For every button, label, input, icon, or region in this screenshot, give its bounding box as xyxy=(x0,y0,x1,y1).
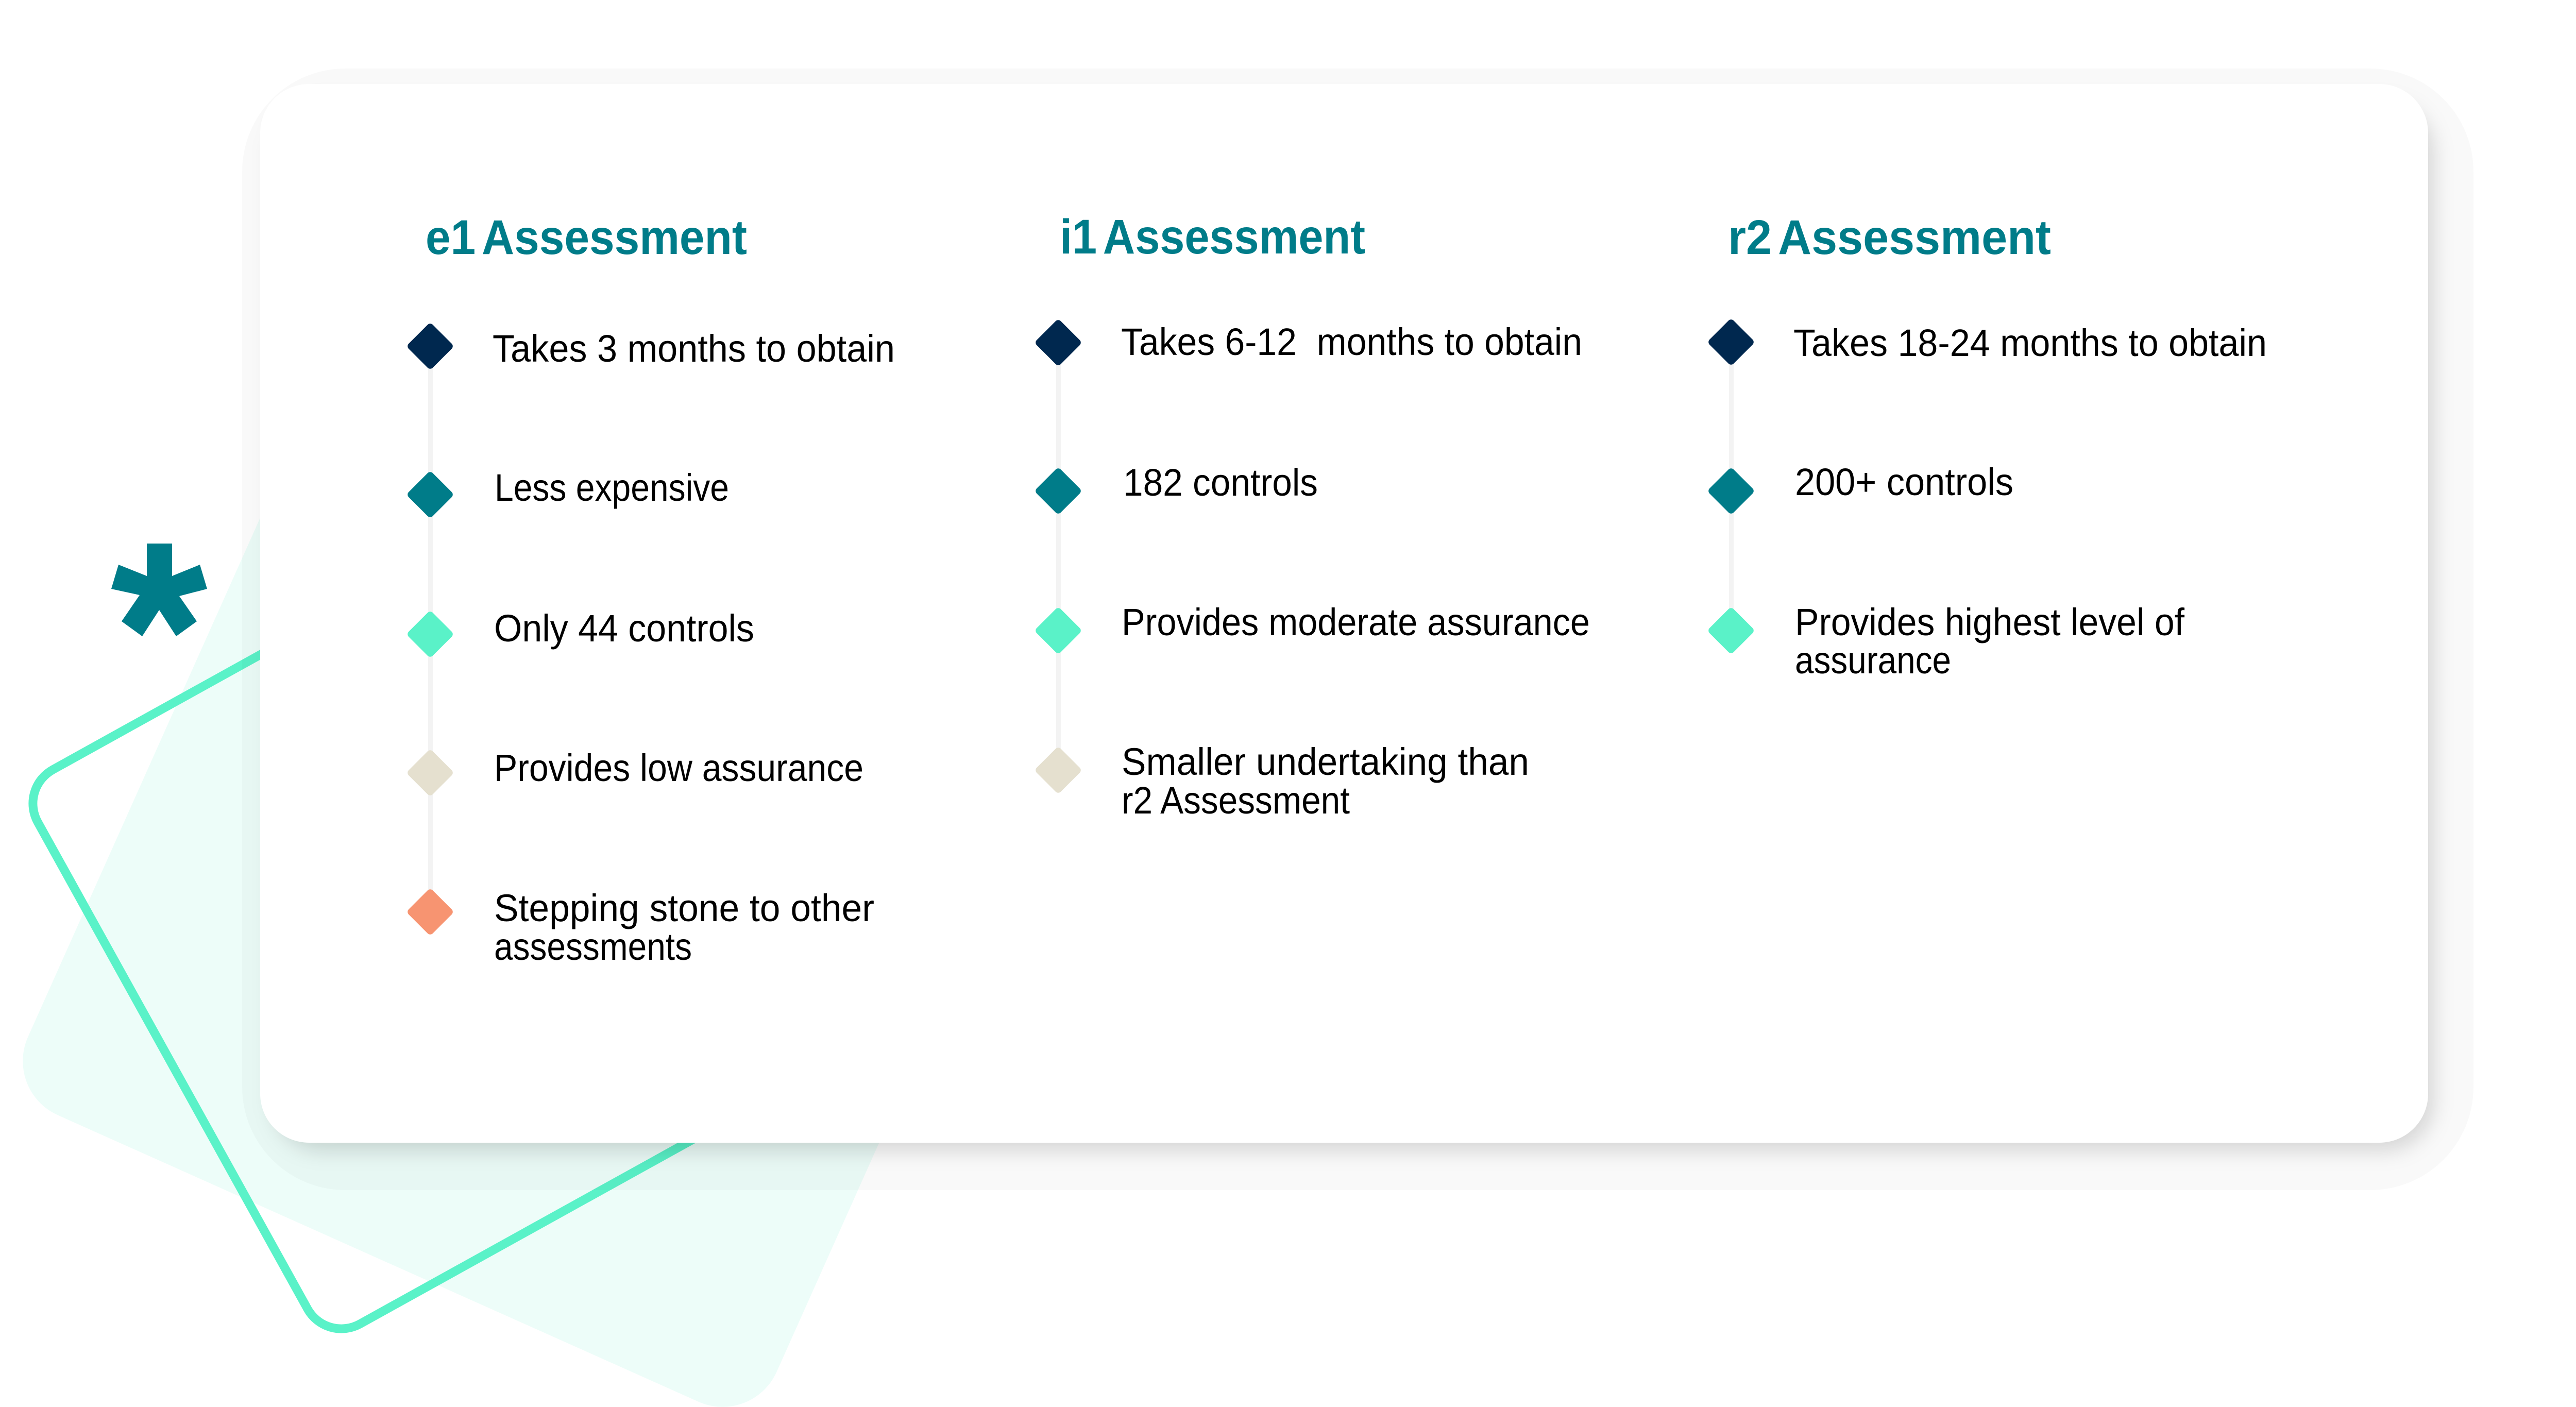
item: less expensive: Less expensive xyxy=(495,466,729,509)
item: only 44 controls: Only 44 controls xyxy=(494,607,754,650)
item: smaller undertaking: Smaller undertaking than xyxy=(1122,740,1529,783)
item: provides low assurance: Provides low assurance xyxy=(494,747,863,789)
item: 200+ controls: 200+ controls xyxy=(1795,461,2013,503)
item: stepping stone xyxy=(406,887,874,968)
item: provides highest level xyxy=(1707,601,2184,682)
card soft drop shadow xyxy=(273,103,2433,1150)
icon: teal asterisk xyxy=(111,544,207,636)
item: stepping stone: assessments xyxy=(494,925,692,968)
timeline connector xyxy=(1729,342,1734,631)
background shape: pale mint rotated square xyxy=(4,342,1088,1407)
item: 182 controls xyxy=(1034,461,1318,515)
timeline connector xyxy=(1056,343,1061,770)
item: takes 18-24 months: Takes 18-24 months to obtain xyxy=(1793,321,2267,364)
column: i1 Assessment xyxy=(1034,210,1590,822)
item: provides highest level: assurance xyxy=(1795,639,1951,682)
item: provides highest level: Provides highest level of xyxy=(1795,601,2184,643)
item: takes 3 months: Takes 3 months to obtain xyxy=(493,327,895,370)
heading: r2 Assessment: r2 Assessment xyxy=(1728,210,2051,265)
item: provides moderate assurance xyxy=(1034,601,1590,655)
item: provides moderate assurance: Provides moderate assurance xyxy=(1122,601,1590,643)
item: smaller undertaking: r2 Assessment xyxy=(1122,779,1350,822)
item: only 44 controls xyxy=(406,607,754,658)
item: takes 6-12 months: Takes 6-12 months to obtain xyxy=(1121,320,1582,363)
column: e1 Assessment xyxy=(406,210,895,968)
panel: white card xyxy=(260,84,2428,1143)
card outer shadow band xyxy=(242,69,2473,1190)
item: less expensive xyxy=(406,466,729,519)
heading: e1 Assessment: e1 Assessment xyxy=(426,210,747,265)
item: smaller undertaking xyxy=(1034,740,1529,822)
timeline connector xyxy=(428,346,433,912)
item: stepping stone: Stepping stone to other xyxy=(494,887,874,929)
column: r2 Assessment xyxy=(1707,210,2267,682)
background shape: mint outlined rotated square xyxy=(19,481,880,1343)
item: provides low assurance xyxy=(406,747,863,797)
item: 182 controls: 182 controls xyxy=(1123,461,1318,504)
item: 200+ controls xyxy=(1707,461,2013,515)
heading: i1 Assessment: i1 Assessment xyxy=(1060,210,1365,264)
